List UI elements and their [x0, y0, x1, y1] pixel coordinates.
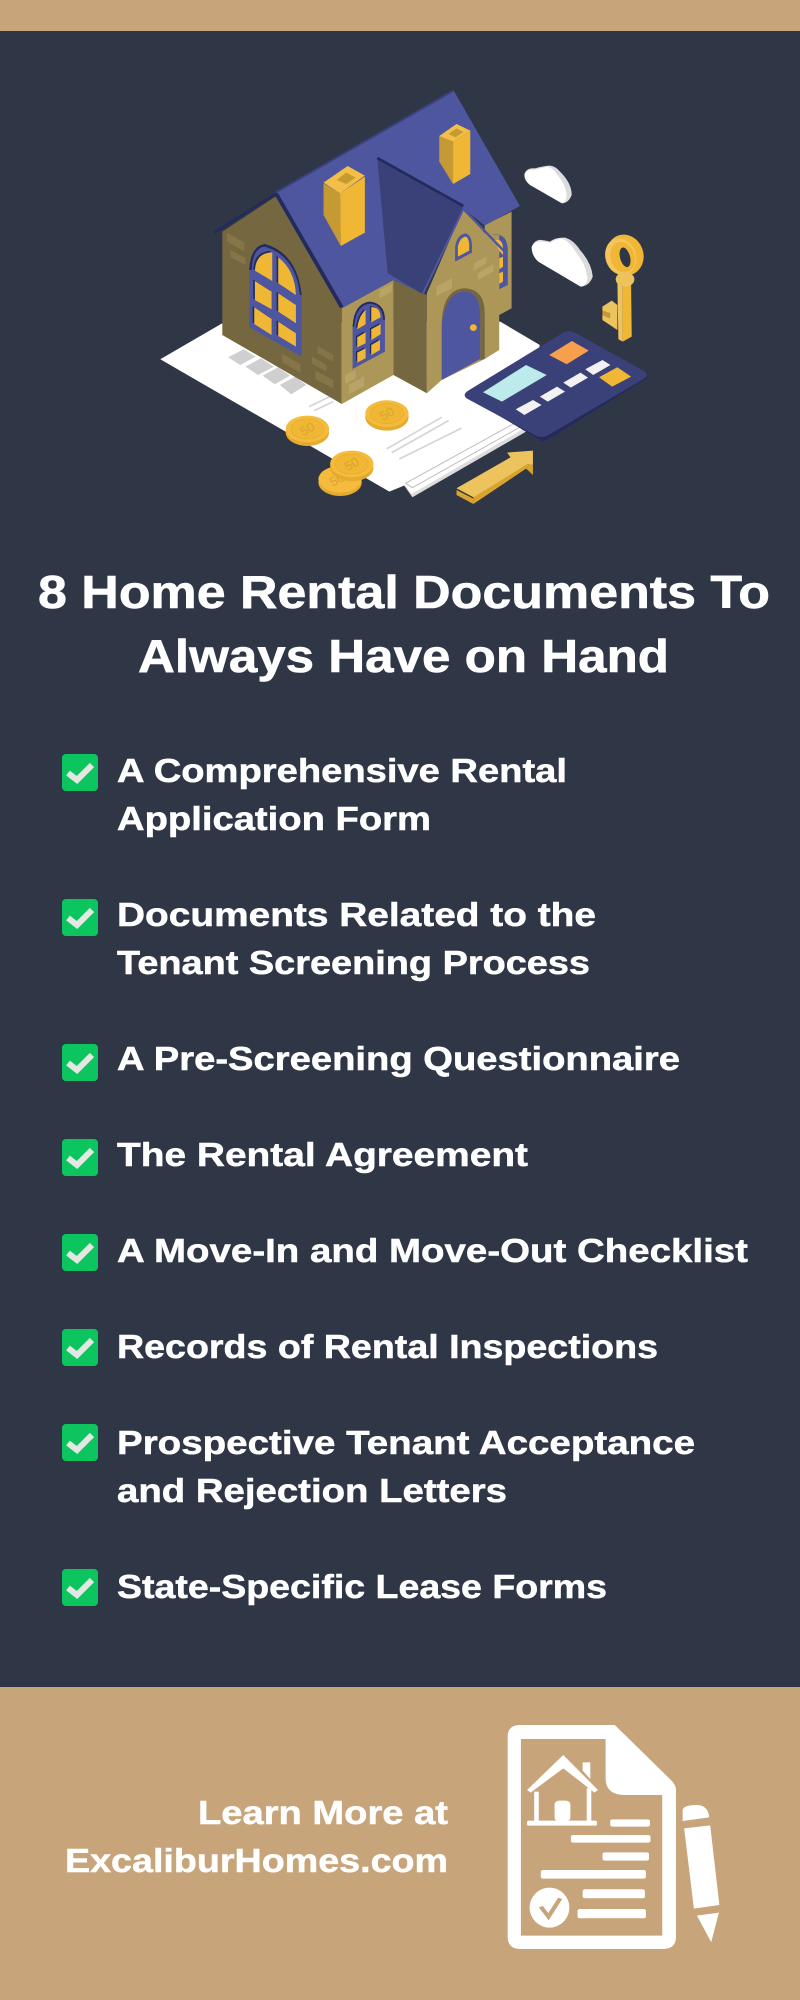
- item 3: A Pre-Screening Questionnaire: [117, 1040, 680, 1077]
- footer call to action: [65, 1794, 448, 1879]
- icon: check box: [62, 1234, 98, 1271]
- item 2: Tenant Screening Process: [117, 944, 590, 981]
- left gable wall: [222, 196, 342, 404]
- gable small window: [455, 233, 472, 262]
- item 7: Prospective Tenant Acceptance: [117, 1424, 695, 1461]
- item 7: and Rejection Letters: [117, 1472, 507, 1509]
- top band: [0, 0, 800, 31]
- icon: check box: [62, 1424, 98, 1461]
- title: 8 Home Rental Documents To: [38, 566, 770, 618]
- icon: document with house and pencil: [508, 1725, 719, 1949]
- item 1: Application Form: [117, 800, 431, 837]
- item 2: Documents Related to the: [117, 896, 596, 933]
- icon: check box: [62, 899, 98, 936]
- dormer roof: [377, 158, 463, 294]
- illustration: isometric house on documents: [160, 91, 649, 504]
- icon: key: [600, 229, 649, 342]
- chimney left: [324, 166, 365, 246]
- back window: [492, 234, 508, 289]
- item 1: A Comprehensive Rental: [117, 752, 567, 789]
- icon: arrow: [456, 451, 533, 504]
- front wall: [342, 280, 393, 404]
- title: Always Have on Hand: [138, 630, 669, 682]
- footer panel: [0, 1687, 800, 2000]
- coin 1: 50: [297, 419, 317, 439]
- item 1: [62, 752, 567, 837]
- door: [442, 288, 485, 380]
- back wall: [485, 212, 512, 315]
- porch side wall: [393, 280, 427, 393]
- icon: coins: [286, 400, 409, 496]
- item 6: Records of Rental Inspections: [117, 1328, 658, 1365]
- checklist: [62, 752, 748, 1606]
- item 2: [62, 896, 596, 981]
- title: [38, 566, 770, 682]
- large arched window: [249, 244, 302, 357]
- icon: credit card: [464, 331, 647, 441]
- brick details: [227, 233, 333, 388]
- footer call to action: ExcaliburHomes.com: [65, 1842, 448, 1879]
- item 5: A Move-In and Move-Out Checklist: [117, 1232, 748, 1269]
- icon: check box: [62, 1329, 98, 1366]
- coin 2: 50: [377, 404, 397, 423]
- house: [214, 91, 520, 404]
- footer call to action: Learn More at: [198, 1794, 448, 1831]
- item 8: State-Specific Lease Forms: [117, 1568, 607, 1605]
- roof: [276, 91, 520, 308]
- icon: check box: [62, 1044, 98, 1081]
- chimney right: [439, 124, 470, 184]
- item 4: The Rental Agreement: [117, 1136, 528, 1173]
- document sheets: [160, 322, 540, 497]
- small arched window: [353, 302, 385, 369]
- icon: clouds: [524, 166, 593, 287]
- coin 3: 50: [327, 470, 347, 489]
- icon: check box: [62, 1139, 98, 1176]
- coin 4: 50: [342, 454, 362, 474]
- item 4: [62, 1136, 528, 1176]
- item 7: [62, 1424, 695, 1509]
- icon: check box: [62, 754, 98, 791]
- icon: check box: [62, 1569, 98, 1606]
- porch front wall: [427, 208, 499, 393]
